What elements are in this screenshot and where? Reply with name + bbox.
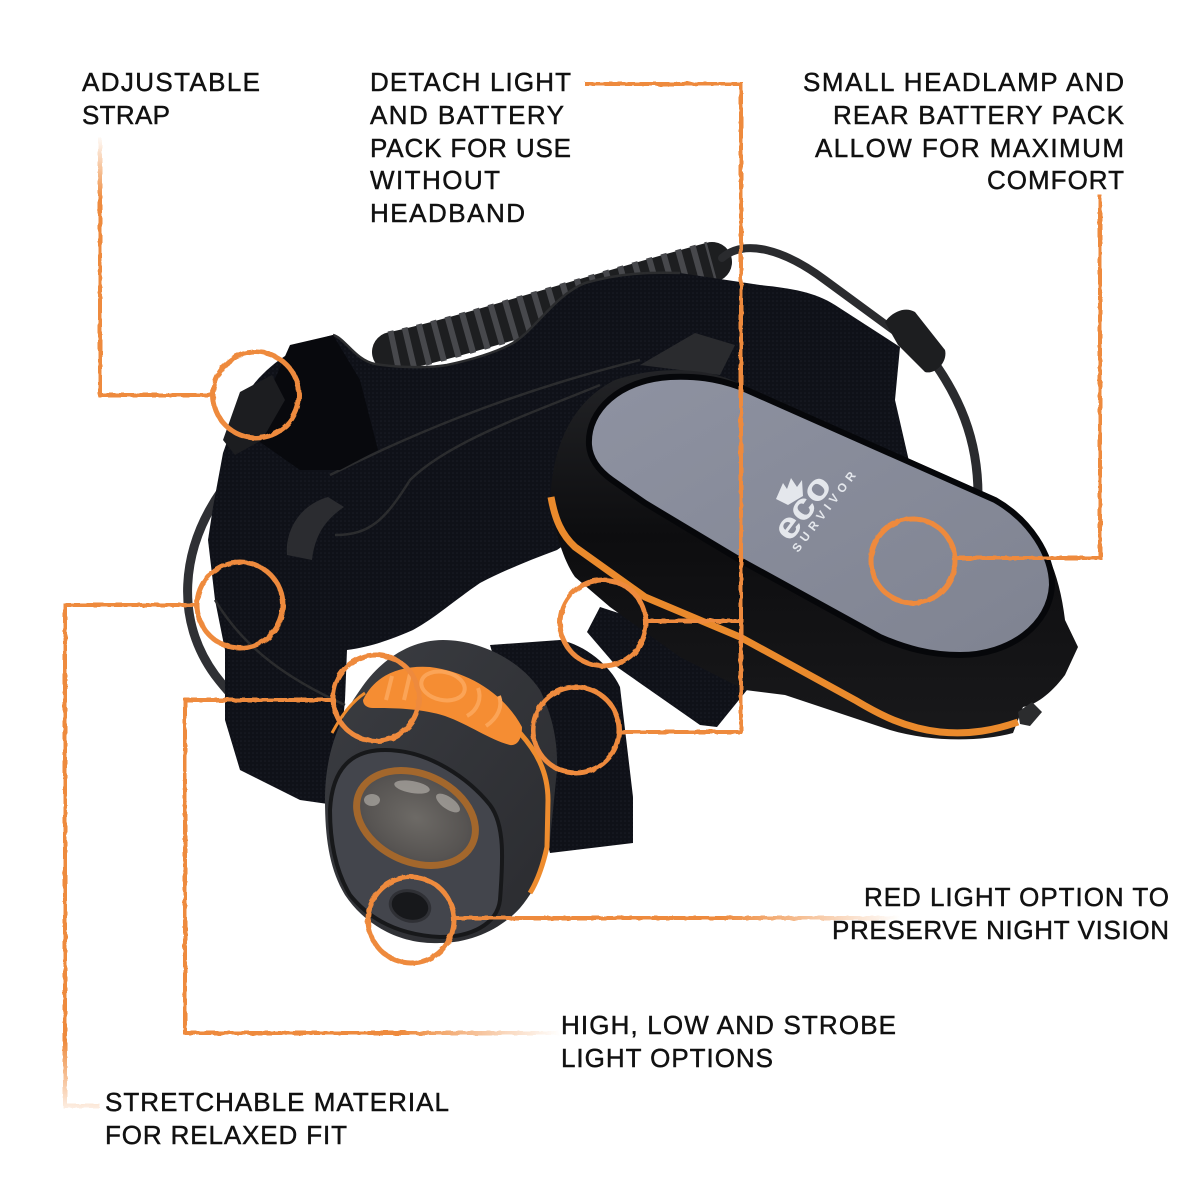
- label: adjustable strap: [82, 67, 260, 130]
- lamp housing: [325, 640, 557, 943]
- label: small headlamp: SMALL HEADLAMP AND: [803, 67, 1124, 97]
- label: detach light and battery: AND BATTERY: [370, 100, 564, 130]
- logo tree icon: [776, 478, 803, 505]
- head lamp: [325, 640, 557, 943]
- coiled cable: [392, 248, 900, 352]
- label: small headlamp: [803, 67, 1125, 195]
- label: detach light and battery: HEADBAND: [370, 198, 525, 228]
- head strap: [208, 273, 911, 805]
- label: small headlamp: REAR BATTERY PACK: [833, 100, 1125, 130]
- callout lines and rings: [65, 84, 1100, 1106]
- lamp front face: [330, 750, 502, 937]
- label: red light: PRESERVE NIGHT VISION: [832, 915, 1169, 945]
- label: high low strobe: LIGHT OPTIONS: [561, 1043, 773, 1073]
- battery body: [551, 370, 1078, 739]
- top buckle: [640, 333, 735, 375]
- callout: high low strobe: [185, 655, 560, 1033]
- label: detach light and battery: PACK FOR USE: [370, 133, 571, 163]
- label: red light: RED LIGHT OPTION TO: [864, 882, 1169, 912]
- strap loop slider: [287, 497, 344, 560]
- callout: stretchable material: [65, 562, 283, 1106]
- strap right of lamp: [490, 640, 633, 853]
- photo: headlamp product: [188, 248, 1078, 943]
- callout: small headlamp and rear battery pack: [871, 195, 1100, 603]
- dark strap fold: [250, 335, 378, 470]
- logo: eco survivor: eco: [764, 466, 840, 548]
- button ridges: [386, 668, 500, 726]
- lamp orange trim: [520, 733, 548, 893]
- callout: adjustable strap: [100, 138, 299, 438]
- label: detach light and battery: WITHOUT: [370, 165, 500, 195]
- label: detach light and battery: DETACH LIGHT: [370, 67, 571, 97]
- lens highlights: [364, 778, 463, 816]
- battery orange stripe: [551, 497, 1018, 733]
- label: stretchable material: [105, 1087, 449, 1150]
- label: red light: [832, 882, 1169, 945]
- rear battery buckle: [885, 310, 945, 372]
- label: adjustable strap: ADJUSTABLE: [82, 67, 260, 97]
- lamp left trim: [332, 693, 365, 733]
- label: small headlamp: ALLOW FOR MAXIMUM: [815, 133, 1124, 163]
- battery pack: [551, 370, 1078, 739]
- orange button: [363, 667, 522, 745]
- cable to battery: [925, 350, 978, 495]
- strap stitched edges: [215, 273, 680, 705]
- logo: eco survivor: SURVIVOR: [789, 469, 859, 555]
- label: detach light and battery: [370, 67, 571, 228]
- strap tail under battery: [587, 607, 747, 727]
- label: stretchable material: FOR RELAXED FIT: [105, 1120, 347, 1150]
- strap adjuster buckle: [223, 375, 285, 455]
- label: adjustable strap: STRAP: [82, 100, 170, 130]
- label: high low strobe: [561, 1010, 896, 1073]
- red led: [387, 886, 433, 926]
- label: stretchable material: STRETCHABLE MATERIAL: [105, 1087, 449, 1117]
- battery switch: [1018, 702, 1042, 726]
- cable to lamp: [188, 490, 335, 775]
- callout: detach light and battery: [533, 84, 741, 773]
- lens: [341, 753, 491, 883]
- callout: red light: [368, 877, 900, 963]
- label: high low strobe: HIGH, LOW AND STROBE: [561, 1010, 896, 1040]
- battery lid: [589, 377, 1052, 655]
- label: small headlamp: COMFORT: [987, 165, 1124, 195]
